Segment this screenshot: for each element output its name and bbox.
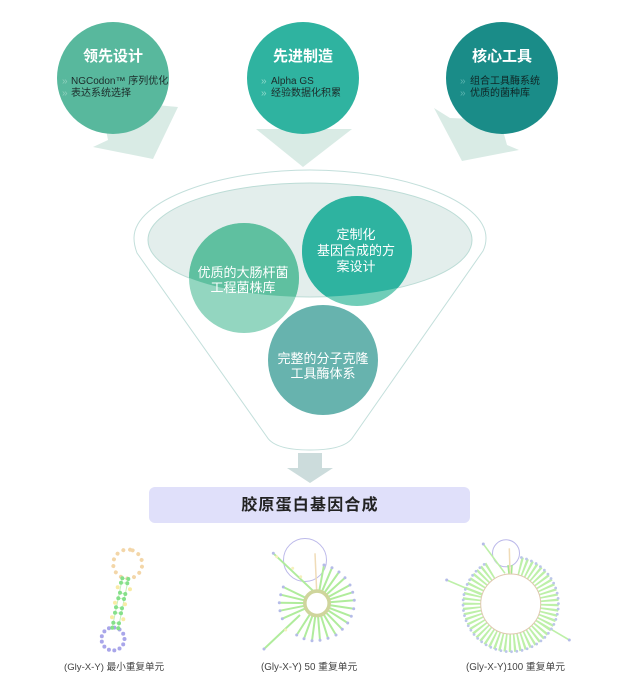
list: 先进制造 items: 经验数据化积累 bbox=[271, 86, 341, 99]
funnel inner surface bbox=[148, 183, 472, 297]
list: 核心工具 items: 优质的菌种库 bbox=[470, 86, 530, 99]
list: 领先设计 items: » bbox=[62, 88, 68, 99]
list: 先进制造 items bbox=[261, 76, 341, 99]
panel: 核心工具 bbox=[446, 22, 558, 134]
list: 先进制造 items: » bbox=[261, 76, 267, 87]
circle: 优质的大肠杆菌工程菌株库 bbox=[189, 223, 299, 333]
diagram: minimal repeat structure bbox=[102, 545, 146, 650]
funnel outline bbox=[134, 170, 486, 450]
label: 定制化基因合成的方案设计: 基因合成的方 bbox=[317, 243, 395, 258]
list: 领先设计 items: » bbox=[62, 76, 68, 87]
caption: 100 repeats: (Gly-X-Y)100 重复单元 bbox=[466, 660, 565, 673]
label: 完整的分子克隆工具酶体系: 完整的分子克隆 bbox=[277, 351, 369, 366]
list: 核心工具 items bbox=[460, 74, 540, 99]
circle: 完整的分子克隆工具酶体系 bbox=[268, 305, 378, 415]
diagram: 100 repeat structure bbox=[447, 540, 569, 652]
heading: 领先设计: 领先设计 bbox=[83, 48, 143, 65]
list: 核心工具 items: » bbox=[460, 76, 466, 87]
arrow: right input bbox=[434, 108, 519, 161]
panel: 领先设计 bbox=[57, 22, 169, 134]
list: 先进制造 items: » bbox=[261, 88, 267, 99]
list: 领先设计 items: NGCodon™ 序列优化 bbox=[71, 74, 168, 87]
arrow: left input bbox=[93, 100, 178, 159]
caption: 50 repeats: (Gly-X-Y) 50 重复单元 bbox=[261, 660, 358, 673]
diagram: 50 repeat structure bbox=[264, 538, 354, 649]
list: 核心工具 items: » bbox=[460, 88, 466, 99]
label: 定制化基因合成的方案设计: 案设计 bbox=[336, 259, 376, 274]
list: 核心工具 items: 组合工具酶系统 bbox=[470, 74, 540, 87]
panel: 先进制造 bbox=[247, 22, 359, 134]
label: 优质的大肠杆菌工程菌株库: 工程菌株库 bbox=[210, 280, 276, 295]
arrow: centre input bbox=[256, 129, 352, 167]
list: 先进制造 items: Alpha GS bbox=[271, 76, 314, 87]
list: 领先设计 items: 表达系统选择 bbox=[71, 86, 131, 99]
heading: 核心工具: 核心工具 bbox=[472, 47, 532, 65]
label: 优质的大肠杆菌工程菌株库: 优质的大肠杆菌 bbox=[197, 265, 289, 280]
label: 完整的分子克隆工具酶体系: 工具酶体系 bbox=[290, 366, 356, 381]
caption: minimal repeat: (Gly-X-Y) 最小重复单元 bbox=[64, 661, 165, 673]
arrow: funnel output bbox=[287, 453, 333, 483]
label: 定制化基因合成的方案设计: 定制化 bbox=[336, 227, 376, 242]
heading: 胶原蛋白基因合成: 胶原蛋白基因合成 bbox=[241, 495, 379, 514]
result box bbox=[149, 487, 470, 523]
circle: 定制化基因合成的方案设计 bbox=[302, 196, 412, 306]
heading: 先进制造: 先进制造 bbox=[273, 48, 333, 65]
list: 领先设计 items bbox=[62, 74, 168, 99]
